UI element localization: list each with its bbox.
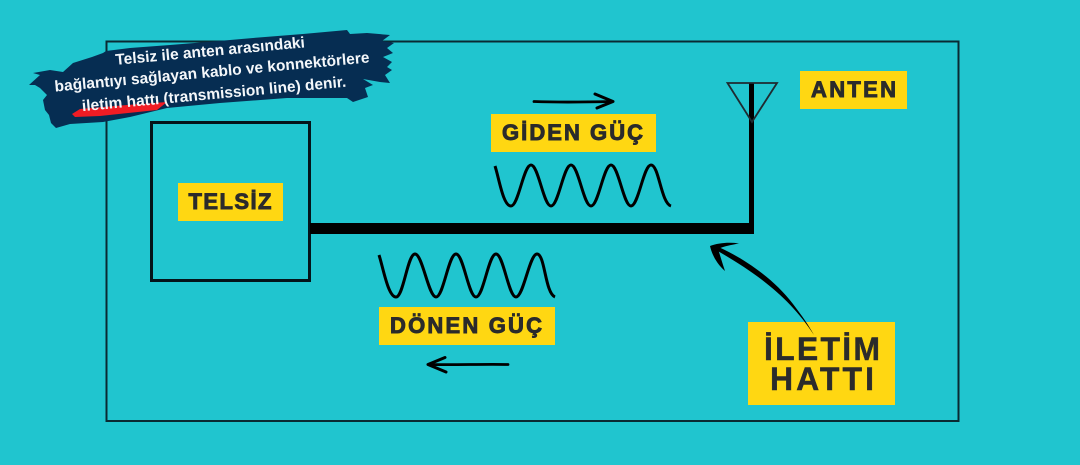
arrow: points to transmission line bbox=[710, 243, 814, 335]
brush stroke background bbox=[29, 30, 394, 128]
label: anten bbox=[800, 71, 907, 109]
icon: antenna bbox=[728, 83, 777, 122]
label: giden guc bbox=[491, 114, 656, 152]
radio box bbox=[152, 122, 310, 280]
label: telsiz bbox=[178, 183, 283, 221]
transmission line and antenna mast bbox=[310, 83, 754, 234]
callout: definition on brush stroke bbox=[29, 28, 394, 128]
wave: forward power bbox=[495, 165, 671, 206]
label: iletim hatti: HATTI bbox=[770, 361, 874, 397]
label: donen guc: DÖNEN GÜÇ bbox=[390, 313, 542, 338]
label: iletim hatti: İLETİM bbox=[764, 331, 880, 367]
callout text: iletim hattı (transmission line) denir. bbox=[81, 74, 347, 115]
callout text bbox=[52, 28, 373, 117]
label: anten: ANTEN bbox=[811, 77, 896, 102]
arrow: reflected power bbox=[428, 358, 508, 372]
label: iletim hatti bbox=[748, 322, 895, 405]
arrow: forward power bbox=[534, 94, 613, 108]
label: telsiz: TELSİZ bbox=[188, 189, 272, 214]
wave: reflected power bbox=[379, 254, 555, 297]
outer frame bbox=[106, 42, 958, 421]
callout text: Telsiz ile anten arasındaki bbox=[115, 34, 306, 69]
label: donen guc bbox=[379, 307, 555, 345]
callout text: bağlantıyı sağlayan kablo ve konnektörlere bbox=[54, 49, 371, 96]
red highlight bbox=[72, 102, 167, 117]
label: giden guc: GİDEN GÜÇ bbox=[502, 120, 643, 145]
